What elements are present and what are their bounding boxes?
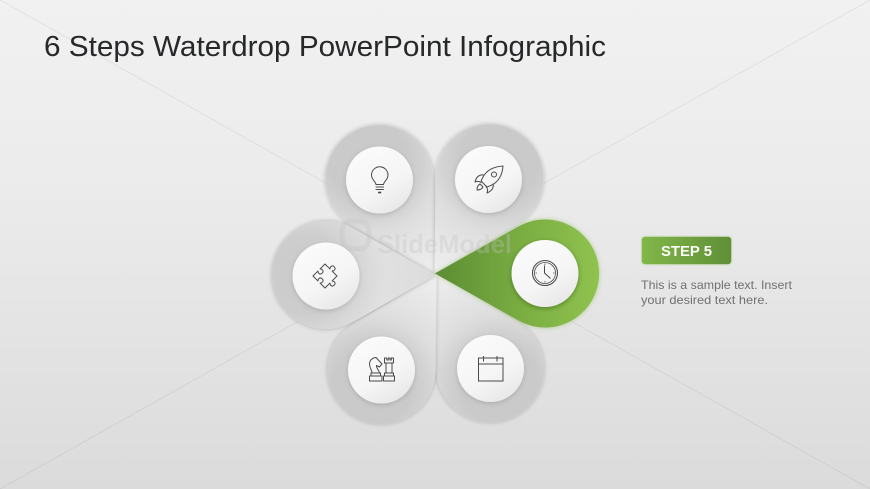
- step 5 label: [641, 236, 732, 265]
- petal: step 5 bottom left: [308, 248, 483, 444]
- petal: step 2 top right: [388, 104, 563, 300]
- watermark: [342, 221, 545, 259]
- petal: step 3 left: [272, 221, 436, 329]
- icon: knight and rook: [370, 358, 394, 381]
- disc: chess pieces: [348, 336, 415, 404]
- petal: step 1 top left: [306, 105, 481, 301]
- icon: lightbulb: [372, 167, 388, 192]
- disc: puzzle: [292, 242, 360, 310]
- step 5 label: STEP 5: [661, 243, 712, 260]
- disc: calendar: [457, 335, 524, 402]
- title: 6 Steps Waterdrop PowerPoint Infographic: [44, 31, 606, 63]
- step 5 description: [641, 278, 793, 307]
- waterdrop diagram: [272, 104, 599, 444]
- disc: rocket: [455, 146, 522, 213]
- icon: clock: [532, 260, 558, 286]
- step 5 description: your desired text here.: [641, 293, 768, 307]
- icon: puzzle piece: [313, 261, 343, 291]
- disc: clock, active step: [512, 240, 578, 307]
- step 5 description: This is a sample text. Insert: [641, 278, 793, 292]
- watermark: SlideModel: [377, 229, 512, 259]
- icon: calendar: [478, 356, 503, 381]
- watermark: .com: [525, 245, 545, 255]
- disc: lightbulb: [346, 146, 413, 214]
- petal: step 5 highlighted green: [435, 220, 599, 328]
- icon: rocket: [475, 166, 503, 193]
- petal: step 6 bottom right: [388, 246, 564, 442]
